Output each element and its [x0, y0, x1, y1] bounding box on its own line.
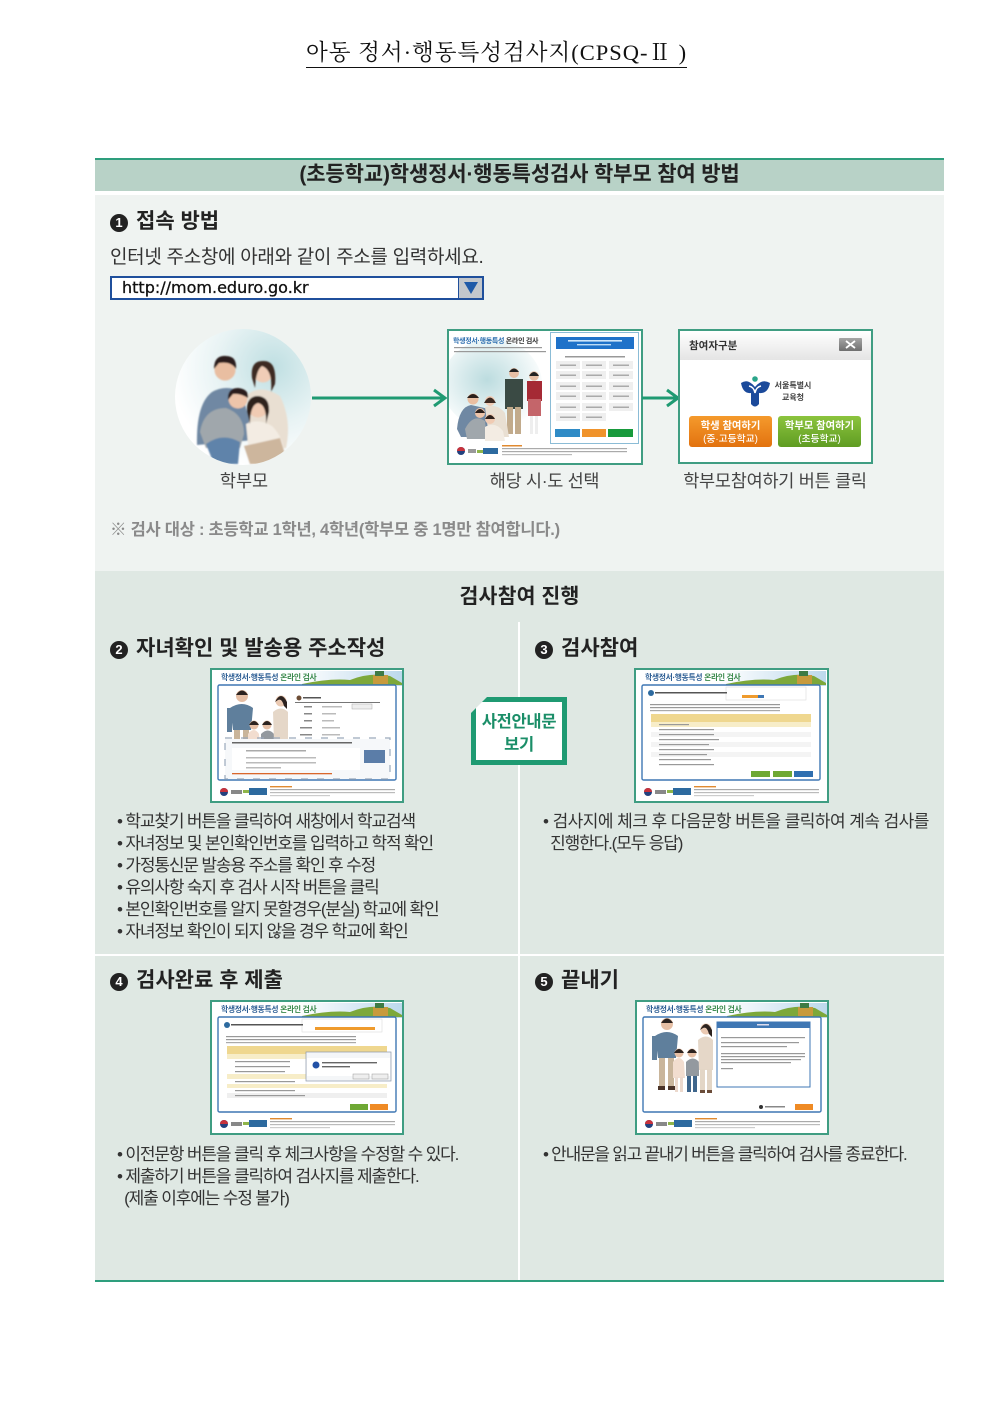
screenshot: participant type dialog: 학부모 참여하기	[785, 419, 854, 432]
caption: click parent button: 학부모참여하기 버튼 클릭	[683, 471, 867, 491]
heading: step 4: 검사완료 후 제출	[136, 969, 283, 992]
step 2 bullet list: • 자녀정보 확인이 되지 않을 경우 학교에 확인	[117, 922, 408, 941]
heading: access method: 1	[115, 215, 123, 230]
heading: step 5: 5	[540, 974, 548, 989]
heading: test progress: 검사참여 진행	[460, 585, 579, 608]
screenshot: survey	[634, 668, 829, 803]
step 2 bullet list: • 유의사항 숙지 후 검사 시작 버튼을 클릭	[117, 878, 379, 897]
step 2 bullet list: • 학교찾기 버튼을 클릭하여 새창에서 학교검색	[117, 812, 415, 831]
screenshot: participant type dialog: 서울특별시	[775, 380, 811, 390]
vertical divider	[518, 622, 520, 1280]
screenshot: participant type dialog: 참여자구분	[689, 339, 738, 352]
callout: advance notice: 사전안내문	[482, 713, 556, 731]
screenshot: participant type dialog: (초등학교)	[798, 432, 841, 445]
step 2 bullet list: • 자녀정보 및 본인확인번호를 입력하고 학적 확인	[117, 834, 433, 853]
step 4 text: • 이전문항 버튼을 클릭 후 체크사항을 수정할 수 있다.	[117, 1145, 458, 1164]
heading: access method: 접속 방법	[136, 210, 219, 233]
panel: step 3	[535, 637, 929, 853]
caption: select region: 해당 시·도 선택	[490, 471, 599, 491]
horizontal divider	[95, 954, 944, 956]
step 3 text: 진행한다.(모두 응답)	[550, 834, 682, 853]
note: ※ 검사 대상 : 초등학교 1학년, 4학년(학부모 중 1명만 참여합니다.)	[110, 521, 560, 539]
caption: parent: 학부모	[220, 471, 268, 491]
heading: step 4: 4	[115, 974, 123, 989]
step 2 bullet list: • 본인확인번호를 알지 못할경우(분실) 학교에 확인	[117, 900, 438, 919]
heading: step 3: 3	[540, 642, 548, 657]
dropdown button	[458, 278, 482, 298]
step 4 text: • 제출하기 버튼을 클릭하여 검사지를 제출한다.	[117, 1167, 419, 1186]
step 3 text: • 검사지에 체크 후 다음문항 버튼을 클릭하여 계속 검사를	[543, 812, 929, 831]
heading: step 2: 2	[115, 642, 123, 657]
panel: step 5	[535, 969, 906, 1164]
screenshot: region select	[447, 329, 643, 465]
screenshot: participant type dialog	[678, 329, 873, 464]
heading: step 5: 끝내기	[561, 969, 619, 992]
step 4 text: (제출 이후에는 수정 불가)	[124, 1189, 289, 1208]
panel: test progress	[95, 571, 944, 1280]
screenshot: participant type dialog: (중·고등학교)	[703, 432, 758, 445]
heading: step 5	[535, 969, 619, 992]
heading: step 3: 검사참여	[561, 637, 638, 660]
title: 아동 정서·행동특성검사지(CPSQ-Ⅱ )	[306, 40, 687, 65]
bottom border line	[95, 1280, 944, 1282]
instruction text: 인터넷 주소창에 아래와 같이 주소를 입력하세요.	[110, 247, 483, 268]
callout: advance notice: 보기	[504, 736, 534, 754]
url text: http://mom.eduro.go.kr	[122, 278, 309, 297]
callout: advance notice	[471, 697, 567, 765]
callout corner	[471, 697, 487, 713]
panel: step 4	[110, 969, 458, 1208]
screenshot: region select: 학생정서·행동특성 온라인 검사	[453, 336, 539, 345]
screenshot: submit	[210, 1000, 404, 1135]
step 2 bullet list	[117, 812, 438, 941]
icon: family photo	[175, 329, 311, 465]
arrow: region select to participant	[642, 388, 678, 408]
panel: access method	[95, 195, 944, 571]
screenshot: child verification	[210, 668, 404, 803]
step 5 text: • 안내문을 읽고 끝내기 버튼을 클릭하여 검사를 종료한다.	[543, 1145, 906, 1164]
screenshot: participant type dialog: 교육청	[782, 392, 804, 402]
arrow: parent to region select	[312, 388, 447, 408]
screenshot: participant type dialog: 학생 참여하기	[701, 419, 760, 432]
main header bar: (초등학교)학생정서·행동특성검사 학부모 참여 방법	[299, 163, 740, 186]
address bar	[110, 276, 484, 300]
step 3 text	[543, 812, 929, 853]
step 4 text	[117, 1145, 458, 1208]
heading: step 2: 자녀확인 및 발송용 주소작성	[136, 637, 385, 660]
step 2 bullet list: • 가정통신문 발송용 주소를 확인 후 수정	[117, 856, 375, 875]
main header bar	[95, 158, 944, 191]
panel: step 2	[110, 637, 438, 941]
screenshot: finish	[635, 1000, 829, 1135]
